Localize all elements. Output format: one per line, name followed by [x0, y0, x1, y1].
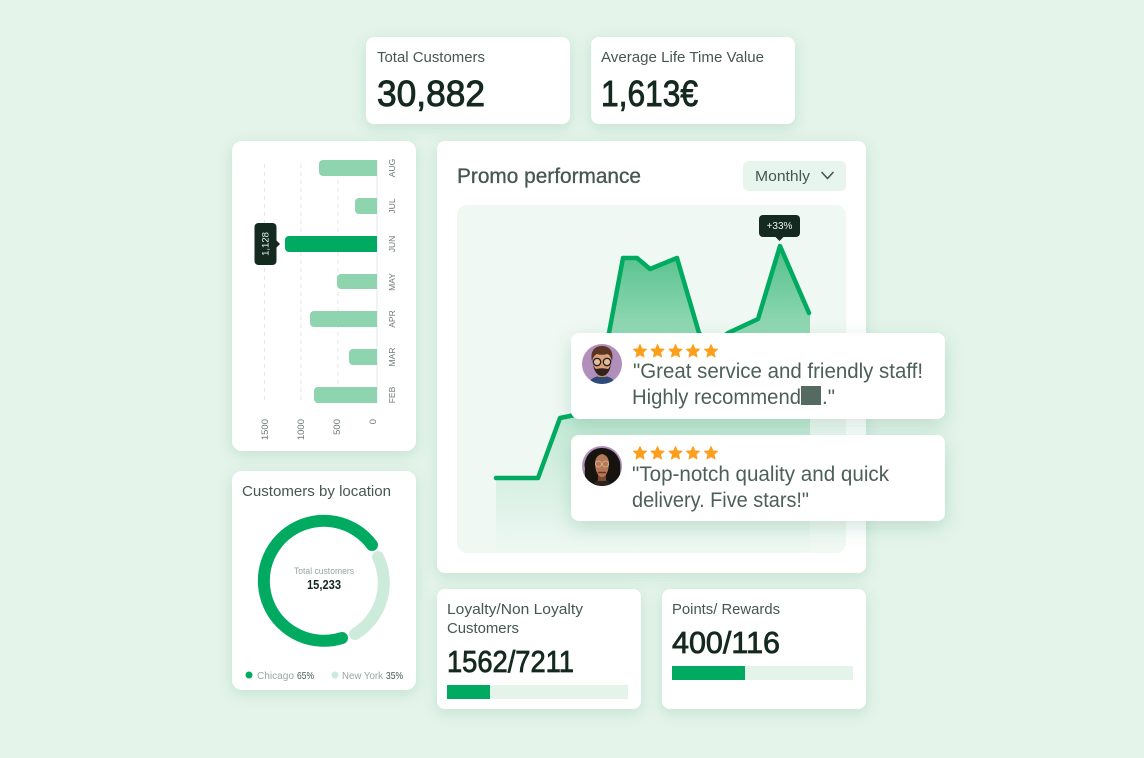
- donut centre label: [294, 566, 354, 592]
- stat card: points / rewards: [662, 589, 866, 709]
- heading: Promo performance: [457, 165, 641, 188]
- rating stars: [634, 447, 718, 459]
- review text: delivery. Five stars!": [632, 489, 809, 512]
- progress bar: [672, 666, 853, 680]
- stat card: loyalty / non loyalty customers: Loyalty/Non Loyalty: [447, 601, 584, 618]
- stat card: points / rewards: Points/ Rewards: [672, 601, 780, 618]
- review text: Highly recommend: [632, 386, 801, 409]
- review card: top-notch quality: [571, 435, 945, 521]
- stat card: loyalty / non loyalty customers: Customers: [447, 620, 519, 637]
- review text: [632, 463, 889, 512]
- stat card: points / rewards: 400/116: [672, 625, 780, 660]
- value axis labels: 0: [368, 419, 379, 424]
- month labels: AUG: [387, 159, 397, 177]
- panel: customers by location: Customers by location: [242, 483, 391, 500]
- donut chart: [264, 521, 384, 641]
- legend: 65%: [297, 670, 314, 682]
- month labels: JUN: [387, 236, 397, 252]
- month labels: FEB: [387, 386, 397, 403]
- stat card: average life time value: Average Life Time Value: [601, 49, 764, 66]
- month labels: MAY: [387, 273, 397, 291]
- review text: [632, 360, 923, 409]
- stat card: loyalty / non loyalty customers: [437, 589, 641, 709]
- stat card: total customers: 30,882: [377, 73, 485, 114]
- panel: promo performance: [437, 141, 866, 573]
- stat card: total customers: Total Customers: [377, 49, 485, 66]
- dropdown: monthly: Monthly: [755, 168, 811, 185]
- donut centre label: Total customers: [294, 566, 354, 576]
- bars: [285, 160, 377, 403]
- legend: [246, 670, 403, 682]
- rating stars: [634, 345, 718, 357]
- tooltip: +33%: [759, 215, 800, 241]
- icon: man avatar: [582, 344, 622, 384]
- stat card: average life time value: [591, 37, 795, 124]
- area chart: [457, 205, 846, 553]
- value axis labels: 1500: [260, 419, 271, 440]
- review text: "Top-notch quality and quick: [632, 463, 889, 486]
- tooltip: 1,128: 1,128: [260, 232, 272, 256]
- legend: 35%: [386, 670, 403, 682]
- value axis labels: [260, 419, 379, 440]
- value axis labels: 1000: [296, 419, 307, 440]
- stat card: loyalty / non loyalty customers: 1562/7211: [447, 644, 574, 679]
- review text: "Great service and friendly staff!: [633, 360, 923, 383]
- icon: woman avatar: [582, 446, 622, 486]
- month labels: APR: [387, 310, 397, 328]
- value axis labels: 500: [332, 419, 343, 435]
- month labels: JUL: [387, 198, 397, 214]
- month labels: MAR: [387, 348, 397, 366]
- tooltip: 1,128: [254, 223, 280, 265]
- stat card: total customers: [366, 37, 570, 124]
- month labels: [387, 159, 397, 403]
- donut centre label: 15,233: [307, 578, 341, 592]
- dropdown: monthly: [743, 161, 846, 191]
- review card: great service: [571, 333, 945, 419]
- legend: Chicago: [257, 670, 294, 682]
- tooltip: +33%: +33%: [767, 221, 793, 232]
- panel: monthly bar chart: [232, 141, 416, 451]
- panel: customers by location: [232, 471, 416, 690]
- stat card: average life time value: 1,613€: [601, 73, 698, 114]
- progress bar: [447, 685, 628, 699]
- legend: New York: [342, 670, 384, 682]
- review text: .": [822, 386, 835, 409]
